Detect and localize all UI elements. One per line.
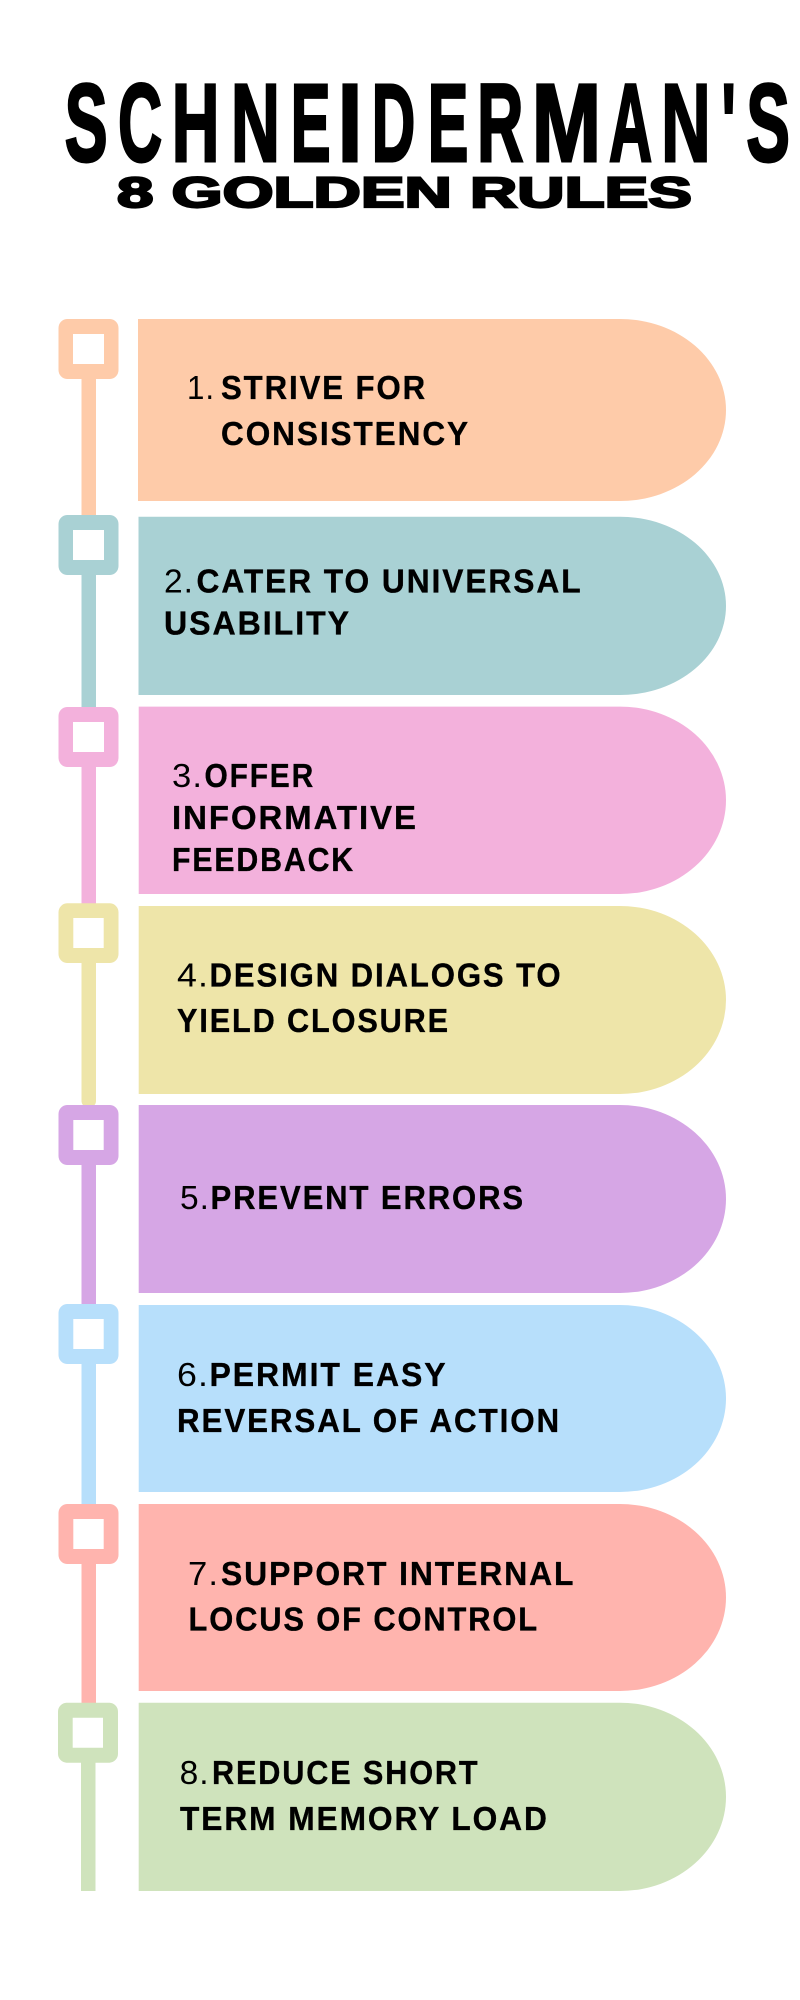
rule 7 text: LOCUS OF CONTROL xyxy=(188,1600,539,1638)
title: N xyxy=(231,62,280,185)
timeline node 4 xyxy=(58,903,119,963)
timeline stem 3 xyxy=(82,758,96,906)
rule 4 text: DESIGN DIALOGS TO xyxy=(210,957,562,994)
timeline node 2 xyxy=(58,515,119,575)
title xyxy=(65,62,790,217)
panel: rule 2 xyxy=(58,515,726,711)
card 2 background xyxy=(138,517,726,695)
timeline node 6 xyxy=(58,1304,119,1364)
card 3 background xyxy=(139,707,726,894)
panel: rule 7 xyxy=(58,1504,726,1705)
timeline stem 7 xyxy=(82,1555,96,1705)
rule 2 text: USABILITY xyxy=(164,604,351,642)
title: ' xyxy=(722,62,736,185)
rule 1 text: CONSISTENCY xyxy=(221,415,470,452)
rule 8 text xyxy=(180,1754,549,1837)
rule 2 text xyxy=(164,563,582,642)
rule 3 text: 3. xyxy=(172,757,203,794)
title: N xyxy=(661,62,710,185)
timeline node 3 xyxy=(58,707,119,767)
rule 8 text: TERM MEMORY LOAD xyxy=(180,1800,549,1837)
card 8 background xyxy=(139,1703,726,1891)
rule 2 text: CATER TO UNIVERSAL xyxy=(196,563,582,600)
card 5 background xyxy=(139,1105,726,1293)
panel: rule 4 xyxy=(58,903,726,1107)
rule 1 text xyxy=(187,369,470,452)
timeline node 8 xyxy=(58,1703,118,1763)
timeline stem 6 xyxy=(82,1355,96,1506)
rule 6 text: PERMIT EASY xyxy=(210,1356,448,1393)
panel: rule 8 xyxy=(58,1703,726,1891)
title: E xyxy=(291,62,330,185)
rule 8 text: 8. xyxy=(180,1754,210,1791)
rule 7 text: 7. xyxy=(188,1555,219,1592)
card 4 background xyxy=(139,906,726,1094)
rule 3 text: FEEDBACK xyxy=(172,841,355,878)
rule 5 text: PREVENT ERRORS xyxy=(210,1179,525,1216)
subtitle: 8 golden rules: 8 GOLDEN RULES xyxy=(117,169,692,217)
rule 1 text: STRIVE FOR xyxy=(221,369,427,406)
panel: rule 5 xyxy=(58,1105,726,1305)
card 1 background xyxy=(138,319,726,501)
timeline stem 1 xyxy=(82,370,96,518)
rule 3 text: INFORMATIVE xyxy=(172,799,418,836)
rule 4 text xyxy=(177,957,562,1039)
title: H xyxy=(172,62,219,185)
timeline node 5 xyxy=(58,1105,119,1165)
card 6 background xyxy=(139,1305,726,1492)
panel: rule 3 xyxy=(58,707,726,906)
title: A xyxy=(609,62,652,185)
timeline stem 5 xyxy=(82,1155,96,1305)
rule 6 text: 6. xyxy=(177,1356,209,1393)
panel: rule 1 xyxy=(58,319,726,518)
timeline stem 8 xyxy=(81,1755,96,1891)
rule 6 text xyxy=(177,1356,561,1439)
rule 5 text: 5. xyxy=(180,1179,210,1216)
rule 6 text: REVERSAL OF ACTION xyxy=(177,1402,561,1439)
timeline node 1 xyxy=(58,319,119,379)
card 7 background xyxy=(139,1504,726,1691)
rule 7 text: SUPPORT INTERNAL xyxy=(221,1555,575,1592)
rule 8 text: REDUCE SHORT xyxy=(212,1754,480,1791)
title line: Schneiderman's: S xyxy=(65,62,108,185)
title: E xyxy=(428,62,468,185)
title: D xyxy=(372,62,415,185)
rule 2 text: 2. xyxy=(164,563,194,600)
title: R xyxy=(477,62,523,185)
rule 3 text xyxy=(172,757,418,878)
title: M xyxy=(532,62,601,185)
rule 7 text xyxy=(188,1555,575,1638)
rule 3 text: OFFER xyxy=(204,757,315,794)
timeline stem 4 xyxy=(82,955,96,1107)
rule 1 text: 1. xyxy=(187,369,215,406)
timeline node 7 xyxy=(58,1504,119,1564)
timeline stem 2 xyxy=(82,566,96,711)
title: I xyxy=(338,62,362,185)
title: C xyxy=(118,62,162,185)
panel: rule 6 xyxy=(58,1304,726,1506)
rule 4 text: 4. xyxy=(177,957,209,994)
rule 4 text: YIELD CLOSURE xyxy=(177,1002,450,1039)
